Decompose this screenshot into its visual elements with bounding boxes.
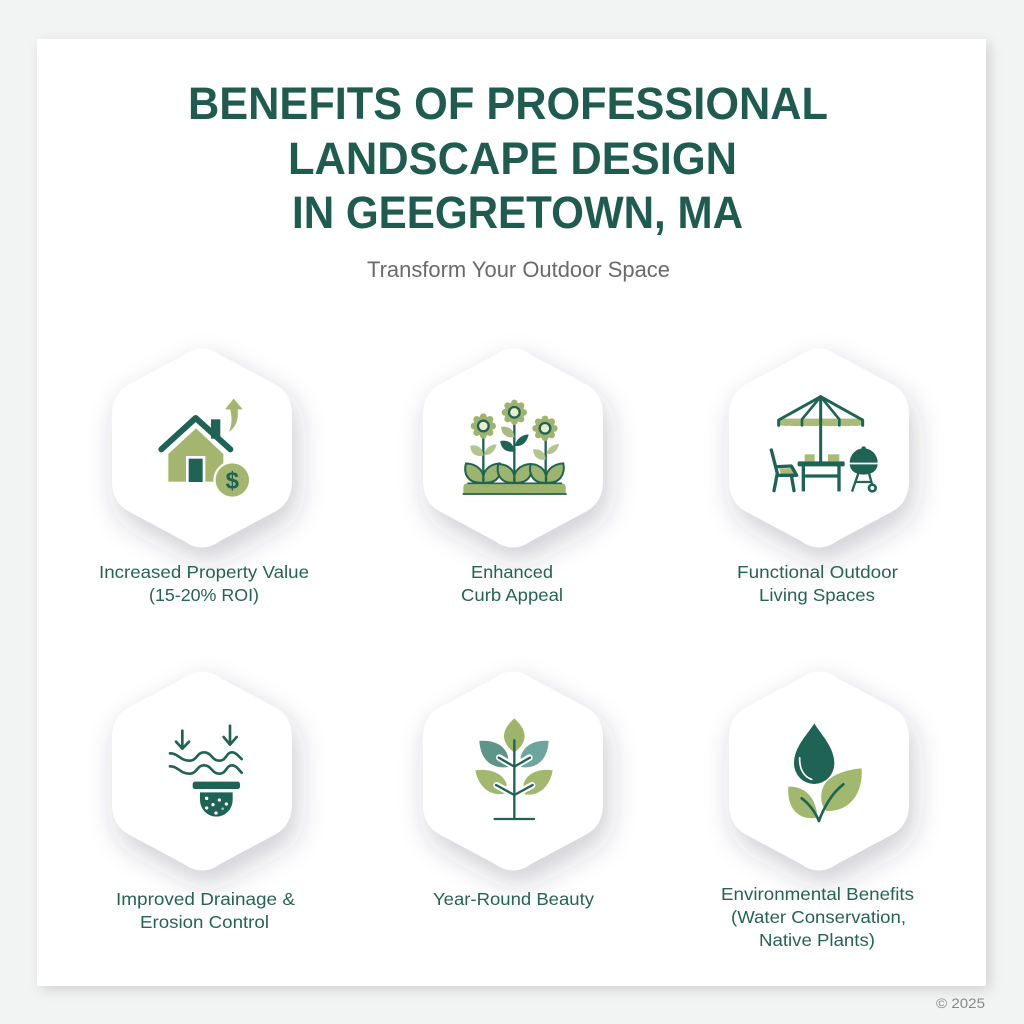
label xyxy=(737,562,898,605)
subtitle: Transform Your Outdoor Space xyxy=(367,257,670,282)
label: Year-Round Beauty xyxy=(433,889,594,909)
benefit: environmental benefits xyxy=(721,672,914,950)
icon: plant with leaves xyxy=(475,718,553,819)
hexagon badge xyxy=(112,672,292,870)
label xyxy=(99,562,309,605)
label: Improved Drainage & xyxy=(116,889,295,909)
title xyxy=(188,78,828,238)
label: (15-20% ROI) xyxy=(149,585,259,605)
label: Environmental Benefits xyxy=(721,884,914,904)
label: Erosion Control xyxy=(140,912,269,932)
label: Enhanced xyxy=(471,562,553,582)
hexagon badge xyxy=(112,348,292,548)
label: Curb Appeal xyxy=(461,585,563,605)
icon: house with dollar coin and arrow: $ xyxy=(226,467,239,494)
label: Native Plants) xyxy=(759,930,875,950)
benefit: improved drainage and erosion control xyxy=(112,672,295,932)
icon: house with dollar coin and arrow xyxy=(161,399,251,499)
copyright note: © 2025 xyxy=(936,995,985,1011)
label: Functional Outdoor xyxy=(737,562,898,582)
label xyxy=(721,884,914,950)
benefit: increased property value xyxy=(99,348,309,605)
label xyxy=(116,889,295,932)
hexagon badge xyxy=(423,348,603,548)
hexagon badge xyxy=(729,672,909,870)
benefit: year-round beauty xyxy=(423,672,603,909)
benefit: enhanced curb appeal xyxy=(423,348,603,605)
label xyxy=(461,562,563,605)
title: BENEFITS OF PROFESSIONAL xyxy=(188,78,828,129)
icon: water drainage xyxy=(170,726,242,817)
hexagon badge xyxy=(729,348,909,548)
title: LANDSCAPE DESIGN xyxy=(288,133,737,184)
label: (Water Conservation, xyxy=(731,907,906,927)
title: IN GEEGRETOWN, MA xyxy=(292,187,743,238)
label: Living Spaces xyxy=(759,585,875,605)
icon: patio umbrella, table, chair and grill xyxy=(771,397,878,492)
benefit: functional outdoor living spaces xyxy=(729,348,909,605)
label: Increased Property Value xyxy=(99,562,309,582)
icon: water drop and leaves xyxy=(788,723,862,821)
icon: flower bed xyxy=(463,400,567,494)
hexagon badge xyxy=(423,672,603,870)
